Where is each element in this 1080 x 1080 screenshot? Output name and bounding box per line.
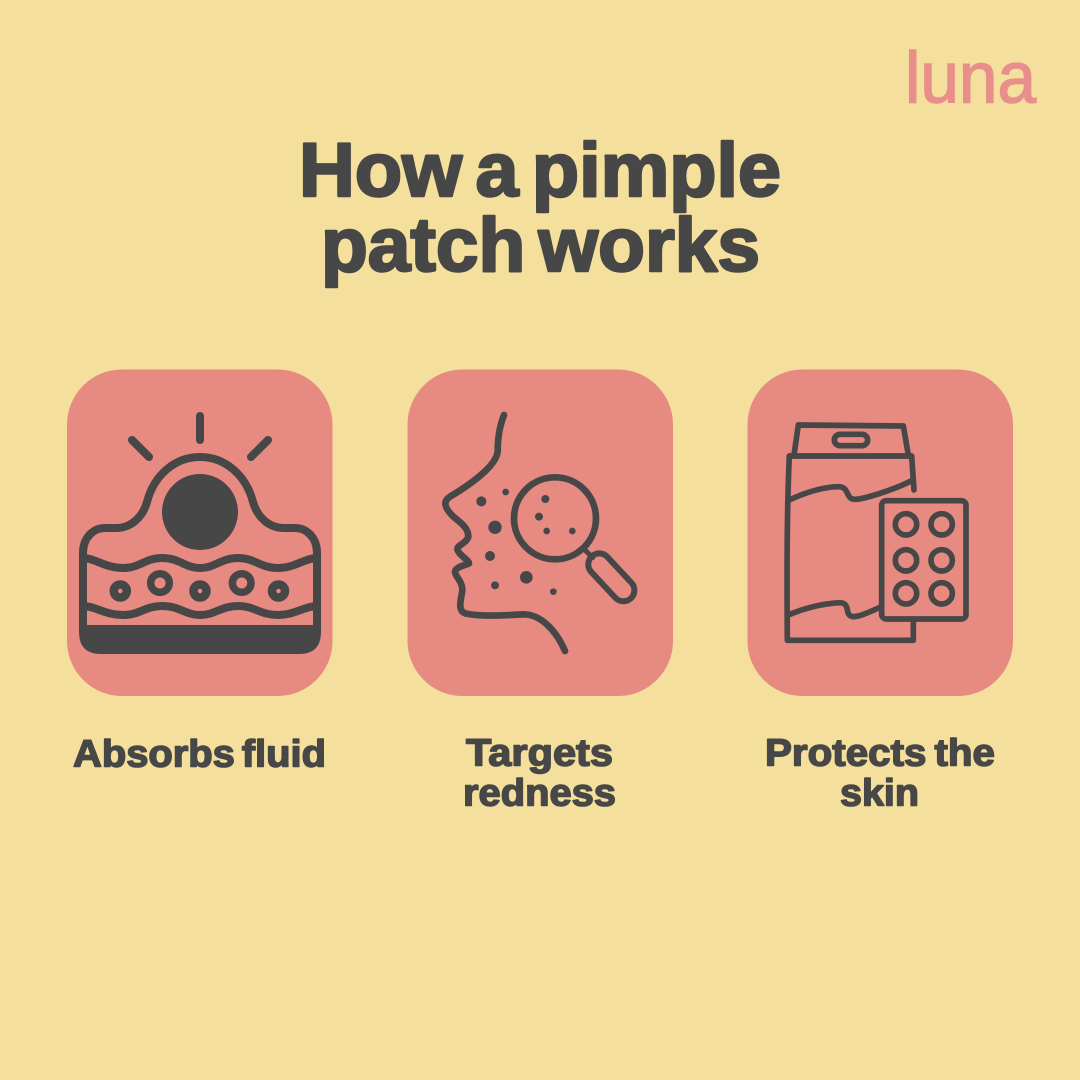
panel: targets redness <box>408 370 673 814</box>
title: How a pimple <box>299 128 781 213</box>
panel background <box>67 370 332 696</box>
panel: protects the skin <box>748 370 1013 814</box>
panel background <box>748 370 1013 696</box>
logo: luna: luna <box>905 38 1037 118</box>
label: protects the skin <box>765 732 995 814</box>
icon: patch pack and blister sheet <box>787 425 966 640</box>
label: protects the skin: Protects the <box>765 732 995 774</box>
label: protects the skin: skin <box>840 772 919 814</box>
label: targets redness <box>463 732 616 814</box>
panel: absorbs fluid <box>67 370 332 776</box>
label: absorbs fluid: Absorbs fluid <box>73 734 326 776</box>
icon: face with magnifier <box>445 415 639 651</box>
icon: pimple on skin layers <box>79 416 321 654</box>
panel background <box>408 370 673 696</box>
label: targets redness: Targets <box>466 732 613 774</box>
title <box>299 128 781 288</box>
label: targets redness: redness <box>463 772 616 814</box>
title: patch works <box>321 203 760 288</box>
